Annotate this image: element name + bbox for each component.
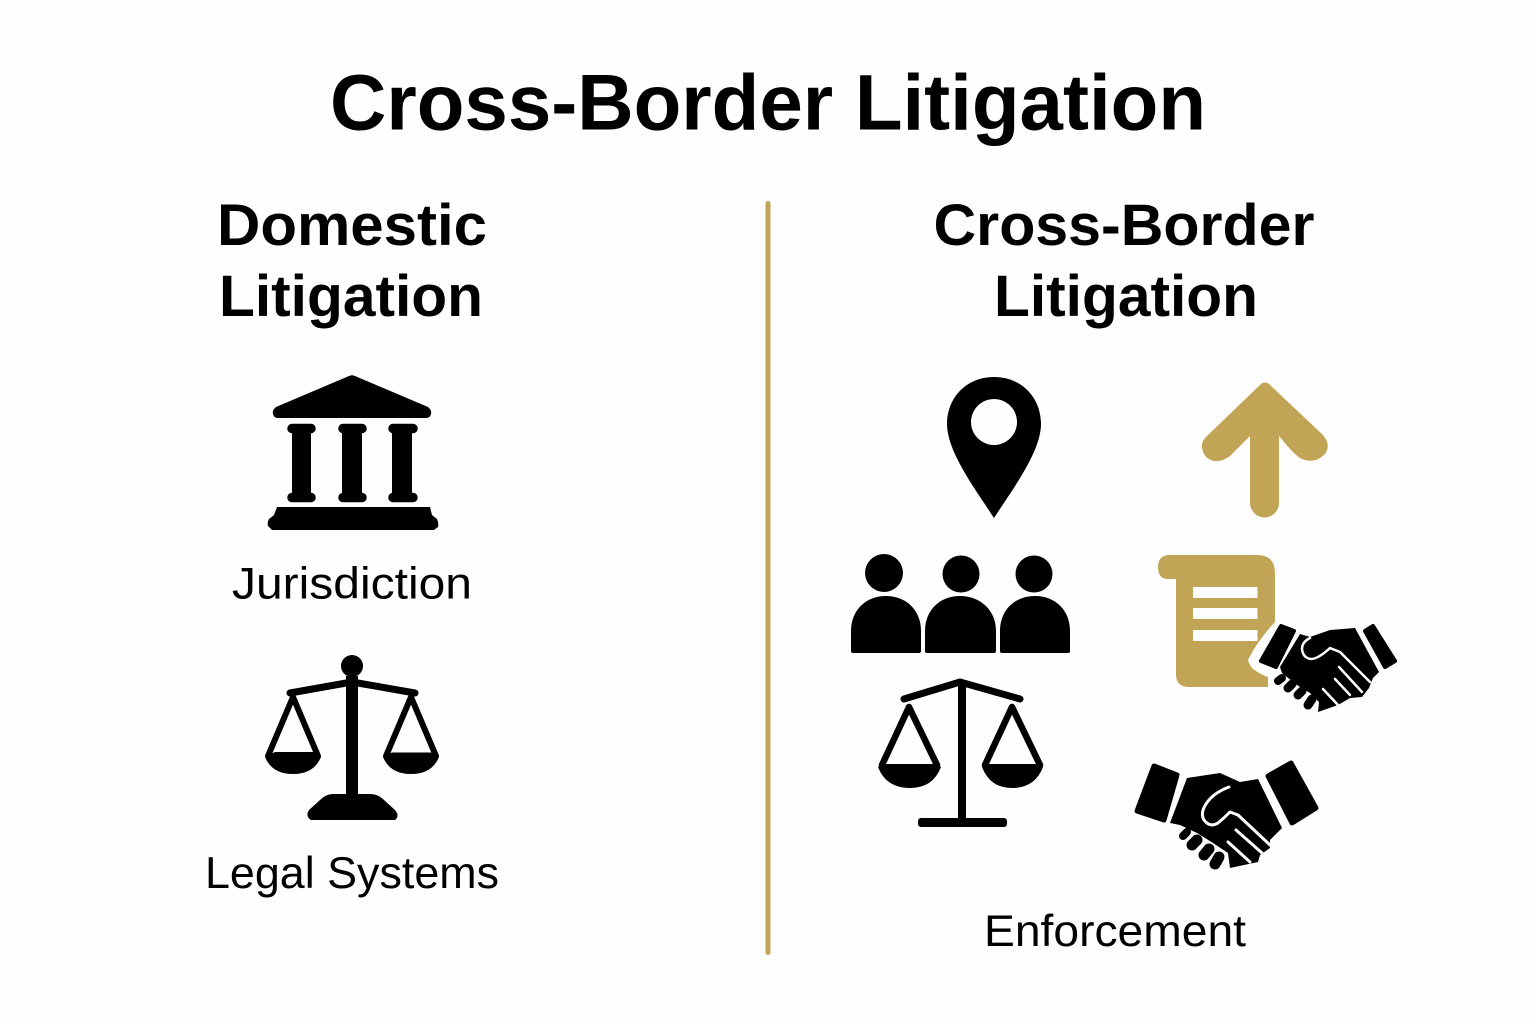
label: enforcement: Enforcement [984,907,1247,956]
heading: domestic litigation: Litigation [219,264,483,329]
heading: cross-border litigation: Cross-Border [934,193,1314,258]
heading: domestic litigation: Domestic [217,193,487,258]
icon: gold up arrow [1202,382,1328,518]
heading: domestic litigation [217,193,487,329]
center divider [766,201,770,955]
icon: large handshake [1137,763,1316,868]
icon: domestic scales [265,655,439,820]
icon: three people [851,554,1070,653]
label: legal systems: Legal Systems [205,849,499,898]
icon: cross-border scales [878,682,1043,827]
title: Cross-Border Litigation [330,58,1206,146]
heading: cross-border litigation [934,193,1314,329]
icon: courthouse [268,375,438,530]
label: jurisdiction: Jurisdiction [232,560,472,608]
icon: gold document scroll [1158,555,1275,687]
heading: cross-border litigation: Litigation [994,264,1258,329]
icon: small handshake [1261,626,1395,712]
icon: location pin [947,377,1041,518]
